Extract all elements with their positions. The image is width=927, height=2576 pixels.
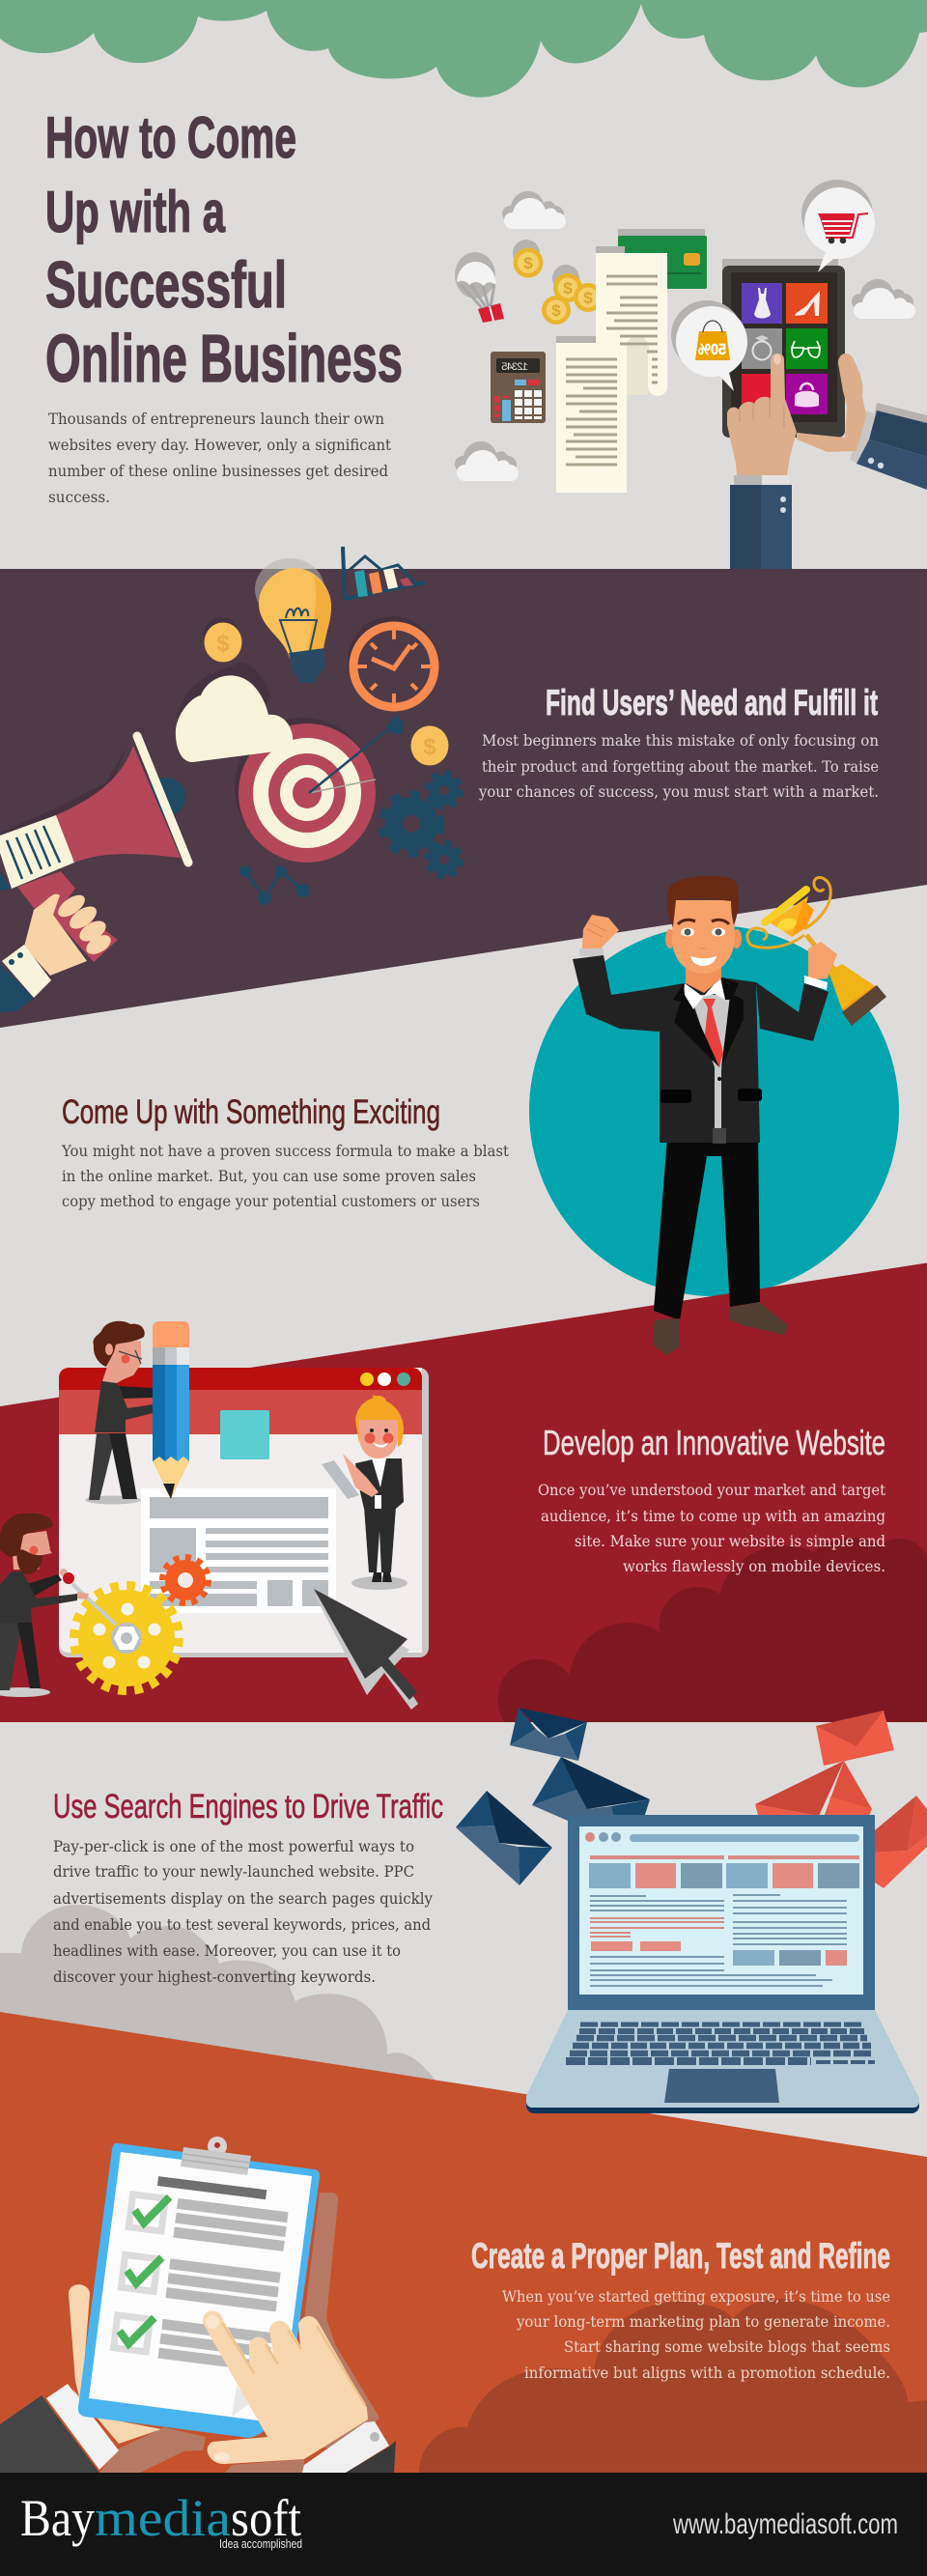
- jacket and tie: [660, 977, 762, 1144]
- logo: Baymediasoft: Bay: [20, 2489, 95, 2547]
- icon: target: [235, 715, 404, 863]
- icon: megaphone and hand: [0, 736, 188, 1012]
- icon: clock: [348, 616, 436, 707]
- intro text: success.: [48, 488, 110, 506]
- icon: orange gear: [163, 1558, 208, 1602]
- icon: calculator: [491, 352, 546, 423]
- icon: line chart: [239, 865, 310, 905]
- intro text: number of these online businesses get desired: [48, 462, 388, 480]
- body text: drive traffic to your newly-launched website. PPC: [53, 1862, 414, 1881]
- grey cloud: [0, 1905, 440, 2086]
- icon: left hand and sleeve: [727, 354, 797, 569]
- body text: discover your highest-converting keywords.: [53, 1967, 376, 1986]
- icon: coin: [203, 617, 241, 663]
- text block: develop an innovative website: [538, 1423, 886, 1575]
- icon: yellow gear: [75, 1587, 178, 1689]
- body text: [502, 2287, 890, 2382]
- title: Online Business: [45, 321, 403, 396]
- body text: [478, 731, 879, 801]
- illustration: laptop: [526, 1815, 919, 2113]
- text block: create a proper plan: [471, 2236, 890, 2382]
- trousers: [654, 1125, 760, 1320]
- icon: calculator: 12345: [501, 362, 528, 374]
- logo: Baymediasoft: soft: [231, 2489, 301, 2547]
- icon: cart speech bubble: [801, 180, 875, 272]
- icon: receipts: [556, 246, 667, 493]
- clip: [181, 2137, 251, 2175]
- illustration: clipboard checklist held in hands: [0, 2137, 396, 2473]
- icon: discount bag speech bubble: [671, 300, 747, 391]
- body text: [61, 1142, 510, 1210]
- body text: works flawlessly on mobile devices.: [623, 1557, 885, 1575]
- panel: footer bar: [0, 2473, 927, 2576]
- body text: their product and forgetting about the market. To raise: [482, 757, 879, 776]
- icon: gears: [382, 774, 461, 876]
- icon: red envelopes: [755, 1711, 927, 1888]
- illustration: online shopping: [455, 180, 927, 569]
- icon: gold coins: $: [551, 301, 561, 320]
- body text: Pay-per-click is one of the most powerful ways to: [53, 1837, 414, 1855]
- title: Up with a: [45, 180, 225, 244]
- left thumb: [69, 2284, 90, 2405]
- left hand, jacket and shadow: [0, 2384, 304, 2473]
- illustration: businessman with trophy: [573, 876, 886, 1355]
- trophy and hand: [747, 878, 886, 1026]
- icon: right sleeve: [850, 403, 927, 490]
- body text: site. Make sure your website is simple and: [575, 1532, 885, 1550]
- icon: light bulb: [255, 558, 331, 683]
- icon: gold coins: $: [583, 289, 593, 307]
- title: How to Come: [45, 105, 296, 170]
- icon: coin: $: [216, 631, 230, 657]
- icon: credit card: [618, 229, 707, 289]
- title: Successful: [45, 248, 287, 322]
- body text: your long-term marketing plan to generate income.: [516, 2312, 890, 2331]
- heading: Use Search Engines to Drive Traffic: [53, 1788, 443, 1826]
- body text: [53, 1837, 433, 1986]
- logo: Baymediasoft: [20, 2489, 302, 2551]
- icon: gold coins: $: [523, 254, 533, 272]
- shoes: [653, 1302, 788, 1355]
- body text: copy method to engage your potential customers or users: [62, 1192, 480, 1210]
- body text: Once you’ve understood your market and target: [538, 1481, 886, 1499]
- right arm: [756, 982, 829, 1041]
- icon: gold coins: [513, 240, 603, 325]
- body text: Start sharing some website blogs that seems: [564, 2337, 890, 2356]
- icon: man with glasses: [85, 1321, 169, 1505]
- icon: woman with tablet: [322, 1396, 407, 1590]
- body text: your chances of success, you must start with a market.: [478, 782, 879, 801]
- laptop base and keyboard: [526, 2010, 919, 2113]
- icon: discount bag speech bubble: 50%: [698, 342, 726, 358]
- body text: Most beginners make this mistake of only focusing on: [482, 731, 879, 750]
- illustration: marketing megaphone and target: [0, 547, 461, 1012]
- icon: gold coins: $: [563, 279, 573, 297]
- intro text: [48, 410, 392, 506]
- heading: Come Up with Something Exciting: [62, 1093, 440, 1131]
- icon: parachute gift: [455, 252, 504, 323]
- checklist content: [113, 2173, 291, 2372]
- logo: Baymediasoft: Idea accomplished: [219, 2536, 302, 2551]
- icon: small clouds: [455, 191, 915, 481]
- body text: [538, 1481, 886, 1575]
- illustration: website builders: [0, 1321, 429, 1710]
- body text: and enable you to test several keywords, prices, and: [53, 1915, 431, 1934]
- body text: headlines with ease. Moreover, you can use it to: [53, 1941, 401, 1960]
- body text: advertisements display on the search pages quickly: [53, 1889, 433, 1908]
- text block: come up with something exciting: [61, 1093, 510, 1210]
- icon: gold coin: $: [423, 734, 436, 760]
- text block: use search engines: [53, 1788, 443, 1986]
- icon: tablet with shop tiles: [722, 259, 845, 438]
- clipboard shadow and hand shadow: [290, 2193, 379, 2453]
- laptop screen: [568, 1815, 875, 2010]
- icon: cream cloud: [176, 663, 293, 762]
- right hand: [203, 2311, 396, 2473]
- icon: right hand holding tablet: [797, 354, 866, 452]
- panel: teal circle: [529, 925, 899, 1296]
- title: [45, 105, 403, 396]
- panel: orange section background: [0, 2012, 927, 2473]
- body text: informative but aligns with a promotion schedule.: [524, 2364, 890, 2382]
- icon: pencil: [153, 1321, 189, 1499]
- intro text: websites every day. However, only a significant: [48, 436, 392, 454]
- browser window: [59, 1368, 429, 1657]
- icon: gold coin: [411, 726, 448, 765]
- panel: dark section background: [0, 569, 927, 1028]
- icon: mouse cursor: [314, 1589, 418, 1710]
- left arm and fist: [573, 915, 684, 1032]
- body text: When you’ve started getting exposure, it’s time to use: [502, 2287, 890, 2306]
- icon: bar chart: [343, 547, 425, 599]
- green cloud banner: [0, 0, 927, 98]
- logo: Baymediasoft: media: [95, 2489, 231, 2547]
- body text: audience, it’s time to come up with an amazing: [541, 1507, 885, 1525]
- icon: blue envelopes: [456, 1708, 650, 1885]
- icon: bearded man with wrench: [0, 1514, 116, 1697]
- body text: in the online market. But, you can use some proven sales: [62, 1167, 476, 1185]
- text block: find users' need: [478, 683, 879, 801]
- intro text: Thousands of entrepreneurs launch their own: [48, 410, 384, 428]
- panel: red section background: [0, 1263, 927, 1722]
- body text: You might not have a proven success formula to make a blast: [61, 1142, 510, 1160]
- head: [665, 876, 742, 993]
- clipboard: [78, 2137, 320, 2438]
